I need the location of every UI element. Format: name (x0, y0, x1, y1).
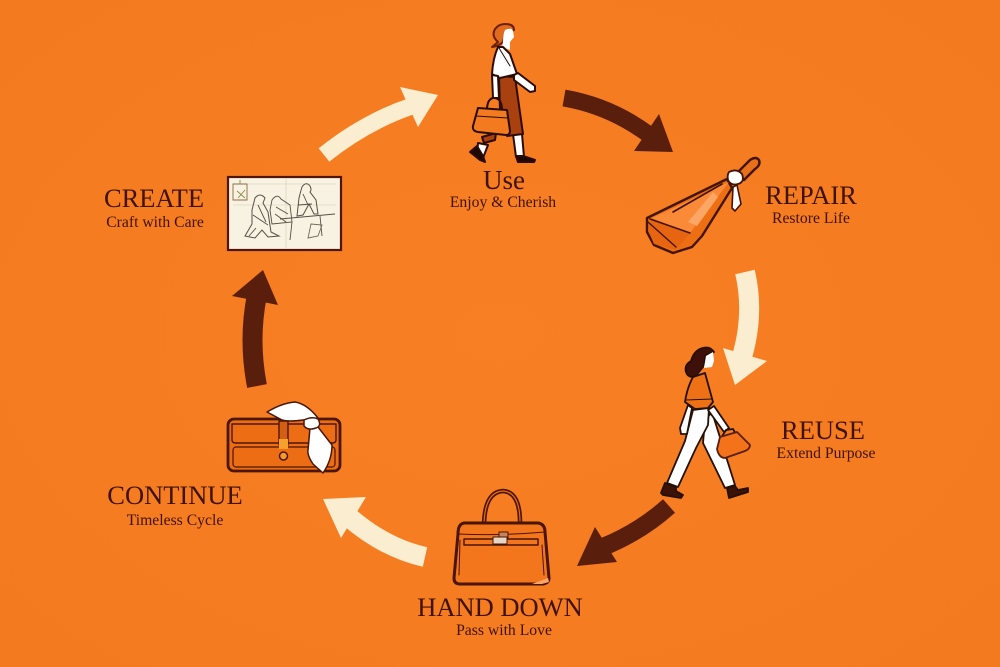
label: Repair: Restore Life (772, 210, 850, 227)
knot (728, 170, 743, 184)
handle (487, 98, 502, 108)
front shoe (661, 483, 683, 498)
rear trouser leg and shoe (477, 143, 488, 158)
icon: workshop sketch (228, 177, 341, 250)
label: Continue (107, 480, 243, 529)
face and neck (502, 29, 514, 50)
front shoe (516, 156, 535, 162)
label: Reuse (777, 415, 875, 462)
arrow: repair to reuse (723, 272, 767, 385)
rear leg (703, 412, 735, 488)
bag (717, 432, 750, 458)
arm front (708, 406, 729, 432)
arrow: hand down to continue (323, 497, 425, 557)
bag handle (721, 429, 737, 438)
arrow: use to repair (564, 98, 673, 152)
icon: clutch with scarf (228, 402, 340, 473)
icon: classic handbag (454, 491, 549, 584)
arrow: reuse to hand down (577, 506, 669, 566)
label: Reuse: Extend Purpose (777, 445, 875, 462)
arrow: create to use (324, 87, 438, 155)
label: Use: Enjoy & Cherish (450, 194, 556, 211)
icon: knotted scarf bundle (647, 158, 760, 253)
label: Hand Down: Pass with Love (456, 622, 552, 639)
arm back (680, 405, 692, 434)
left arm (492, 75, 499, 98)
label: Use: Use (483, 165, 525, 195)
label: Continue: CONTINUE (107, 480, 243, 510)
arrow: continue to create (232, 270, 278, 386)
label: Repair: REPAIR (765, 180, 857, 210)
label: Reuse: REUSE (781, 415, 865, 445)
label: Continue: Timeless Cycle (127, 512, 223, 529)
label: Create: Craft with Care (106, 214, 204, 231)
scarf tail (732, 185, 741, 211)
label: Create: CREATE (104, 183, 204, 213)
label: Hand Down (417, 592, 583, 639)
lit fold (652, 182, 729, 233)
icon: woman walking with small bag (661, 348, 750, 498)
shirt (685, 373, 713, 409)
rear shoe (727, 486, 748, 498)
skirt (499, 76, 523, 136)
handbag body (473, 108, 510, 135)
handle tip (738, 158, 760, 180)
front leg (513, 134, 524, 157)
hair (686, 348, 714, 377)
blouse (492, 47, 517, 78)
face (704, 352, 714, 368)
label: Use (450, 165, 556, 211)
icon: walking woman with handbag (470, 24, 535, 162)
right arm (514, 73, 535, 92)
label: Create (104, 183, 204, 231)
front leg (667, 408, 709, 487)
label: Repair (765, 180, 857, 227)
label: Hand Down: HAND DOWN (417, 592, 583, 622)
hair (492, 24, 514, 47)
